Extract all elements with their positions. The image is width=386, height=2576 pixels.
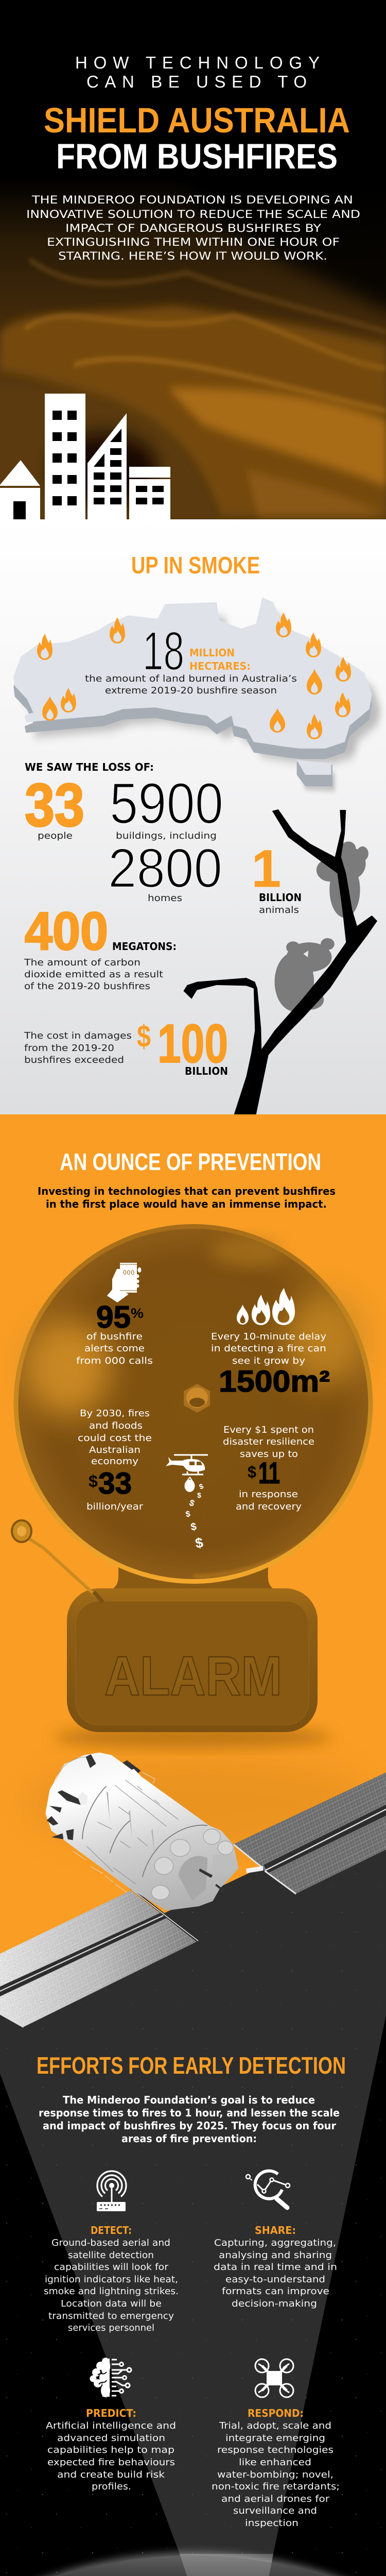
intro text: STARTING. HERE’S HOW IT WOULD WORK. [58, 250, 327, 262]
stat: 18 million hectares [85, 621, 297, 696]
icons: map flames [37, 613, 351, 739]
icon: magnifier with chart [246, 2171, 290, 2208]
stat: 95%: 95 [96, 1300, 131, 1334]
stat: 1500 square metres [211, 1288, 330, 1398]
intro text [26, 194, 360, 262]
intro: goal: and impact of bushfires by 2025. They focus on four [43, 2120, 336, 2132]
stat: 1 billion animals [252, 839, 302, 916]
stat: 1500 square metres: see it grow by [232, 1355, 305, 1366]
bell dome [13, 1224, 373, 1584]
stat: $33 billion: Australian [89, 1445, 141, 1455]
block: share: Capturing, aggregating, [214, 2238, 336, 2248]
text: we saw the loss of: WE SAW THE LOSS OF: [25, 761, 154, 773]
block: respond: non-toxic fire retardants; [212, 2481, 340, 2492]
block: share: SHARE: [255, 2224, 296, 2236]
stat: 18 million hectares: extreme 2019-20 bushfire season [105, 685, 277, 696]
stat: 400 megatons: 400 [25, 902, 108, 961]
block: predict: capabilities help to map [47, 2445, 174, 2455]
stat: 1500 square metres: in detecting a fire can [211, 1343, 326, 1354]
intro: goal: The Minderoo Foundation’s goal is to reduce [63, 2094, 315, 2106]
stat: $33 billion: $ [89, 1472, 98, 1490]
panel: hero [0, 0, 386, 519]
stat: 18 million hectares: the amount of land burned in Australia’s [85, 673, 297, 684]
stat: 400 megatons [24, 902, 177, 992]
stat: 400 megatons: MEGATONS: [112, 940, 177, 953]
stat: 18 million hectares: HECTARES: [189, 660, 251, 672]
intro: goal: response times to fires to 1 hour, and lessen the scale [39, 2107, 340, 2119]
stat: $33 billion: By 2030, fires [80, 1408, 150, 1419]
intro text: INNOVATIVE SOLUTION TO REDUCE THE SCALE AND [26, 208, 360, 221]
icon: helicopter dropping money [166, 1455, 208, 1551]
bell base with ALARM lettering: ALARM [104, 1645, 282, 1707]
block: respond: water-bombing; novel, [217, 2469, 334, 2480]
block: predict: profiles. [92, 2481, 131, 2492]
stat: $11 saved: and recovery [236, 1501, 302, 1512]
stat: 1 billion animals: BILLION [259, 891, 302, 904]
icon: brain circuit [90, 2358, 131, 2397]
intro: goal: areas of fire prevention: [121, 2132, 257, 2145]
panel: prevention and detection sections [0, 1114, 386, 2576]
title: FROM BUSHFIRES [56, 137, 338, 176]
stat: 400 megatons: The amount of carbon [24, 957, 141, 968]
stat: $33 billion: billion/year [86, 1501, 144, 1512]
bell base with ALARM lettering [67, 1566, 318, 1732]
subheading: in the first place would have an immense impact. [46, 1198, 327, 1210]
illustration: earth with australia [0, 2554, 386, 2576]
block: detect: transmitted to emergency [48, 2311, 174, 2321]
block: predict: PREDICT: [86, 2407, 136, 2419]
stat: $11 saved: disaster resilience [223, 1436, 314, 1447]
intro: goal [39, 2094, 340, 2145]
heading: an ounce of prevention: AN OUNCE OF PREVENTION [60, 1148, 321, 1175]
block: respond: like enhanced [239, 2457, 311, 2468]
icon: helicopter dropping money: $ [185, 1510, 191, 1519]
block: respond: surveillance and [233, 2505, 317, 2516]
stat: $11 saved: Every $1 spent on [223, 1425, 314, 1435]
block: predict: Artificial intelligence and [46, 2420, 176, 2431]
stat: $33 billion: could cost the [78, 1433, 152, 1444]
stat: 1500 square metres: Every 10-minute delay [211, 1331, 326, 1342]
stat: $11 saved: 11 [258, 1456, 280, 1490]
panel: an ounce of prevention [0, 1114, 386, 2037]
stat: 1 billion animals: 1 [252, 839, 281, 898]
block: respond: and aerial drones for [221, 2494, 330, 2504]
stat: $100 billion: BILLION [185, 1065, 228, 1077]
block: share: formats can improve [222, 2286, 329, 2297]
title [44, 53, 350, 176]
icon: helicopter dropping money: $ [198, 1482, 205, 1491]
block: detect: DETECT: [91, 2224, 132, 2236]
block: respond: RESPOND: [248, 2407, 304, 2419]
stat: 1500 square metres: 1500m² [219, 1365, 330, 1398]
stat: $100 billion: $ [137, 1019, 151, 1054]
icon: hand holding phone [107, 1263, 141, 1302]
stat: 18 million hectares: 18 [143, 621, 184, 682]
stat: $100 billion: from the 2019-20 [24, 1043, 114, 1054]
block: detect: Ground-based aerial and [51, 2238, 170, 2248]
block: respond: inspection [245, 2518, 299, 2529]
panel: up in smoke [0, 552, 386, 1114]
block: respond: integrate emerging [225, 2433, 325, 2444]
stat: 95%: of bushfire [86, 1331, 143, 1342]
stat: 1 billion animals: animals [259, 905, 299, 916]
heading: up in smoke: UP IN SMOKE [131, 552, 260, 579]
title: CAN BE USED TO [86, 72, 307, 91]
intro text: EXTINGUISHING THEM WITHIN ONE HOUR OF [47, 236, 340, 248]
stat: $11 saved: $ [248, 1463, 256, 1481]
subheading: Investing in technologies that can prevent bushfires [38, 1185, 336, 1197]
stat: 5900 buildings: buildings, including [116, 831, 217, 841]
block: share [214, 2171, 337, 2309]
block: predict [46, 2358, 176, 2492]
stat: $100 billion [24, 1013, 228, 1077]
stat: 400 megatons: dioxide emitted as a result [24, 969, 163, 980]
block: detect [44, 2171, 179, 2333]
title: HOW TECHNOLOGY [75, 53, 320, 72]
stat: $33 billion: economy [91, 1456, 138, 1467]
block: share: decision-making [232, 2298, 317, 2309]
icon: helicopter dropping money: $ [188, 1498, 196, 1509]
block: detect: ignition indicators like heat, [45, 2274, 178, 2285]
illustration: solar panels [0, 1772, 386, 2027]
illustration: burnt tree with koalas [183, 809, 377, 1114]
stat: $11 saved: saves up to [240, 1449, 298, 1460]
icon: helicopter dropping money: $ [197, 1491, 201, 1499]
block: detect: services personnel [68, 2323, 154, 2333]
smoke background [0, 158, 386, 519]
block: detect: Location data will be [61, 2298, 162, 2309]
icon: city buildings [0, 394, 170, 519]
stat: $100 billion: 100 [157, 1013, 228, 1074]
icon: antenna [97, 2171, 126, 2211]
block: detect: smoke and lightning strikes. [44, 2286, 179, 2297]
spotlight beam [0, 1808, 386, 2576]
block: detect: capabilities will look for [54, 2262, 169, 2273]
subheading [38, 1185, 336, 1210]
stat: 2800 homes: homes [148, 893, 182, 904]
block: respond: response technologies [217, 2445, 334, 2455]
block: share: easy-to-understand [225, 2274, 325, 2285]
block: respond: Trial, adopt, scale and [219, 2420, 331, 2431]
stat: 5900 buildings: 5900 [110, 771, 223, 836]
block: detect: satellite detection [68, 2250, 154, 2261]
icon: drone [255, 2359, 293, 2397]
block: share: data in real time and in [214, 2262, 337, 2273]
stat: 400 megatons: of the 2019-20 bushfires [24, 981, 150, 992]
stat: $11 saved: in response [239, 1489, 298, 1500]
block: predict: expected fire behaviours [47, 2457, 175, 2468]
stat: $33 billion: 33 [98, 1467, 132, 1500]
block: respond [212, 2359, 340, 2529]
block: share: analysing and sharing [219, 2250, 332, 2261]
illustration: satellite [45, 1753, 238, 1910]
stat: 33 people: people [38, 831, 73, 841]
stat: 95%: from 000 calls [76, 1355, 153, 1366]
intro text: THE MINDEROO FOUNDATION IS DEVELOPING AN [31, 194, 353, 206]
stat: 95% [76, 1263, 153, 1366]
stat: 95%: alerts come [84, 1343, 145, 1354]
icon: helicopter dropping money: $ [194, 1535, 204, 1551]
icon: helicopter dropping money: $ [190, 1521, 198, 1533]
stat: 18 million hectares: MILLION [189, 647, 235, 659]
stat: 33 people: 33 [25, 771, 84, 839]
map: australia [13, 597, 380, 791]
intro text: IMPACT OF DANGEROUS BUSHFIRES BY [65, 222, 321, 234]
stat: $100 billion: The cost in damages [24, 1030, 132, 1041]
stat: $11 saved [223, 1425, 314, 1512]
icon: growing flames [237, 1288, 295, 1325]
bell striker arm [12, 1520, 103, 1602]
illustration: alarm bell [12, 1224, 376, 1850]
icon: hand holding phone: 000 [123, 1269, 134, 1276]
block: predict: and create build risk [57, 2469, 165, 2480]
title: SHIELD AUSTRALIA [44, 100, 350, 140]
stat: $33 billion [78, 1408, 152, 1512]
stat: 2800 homes: 2800 [108, 837, 222, 899]
stat: $100 billion: bushfires exceeded [24, 1055, 124, 1065]
panel: efforts for early detection [0, 1753, 386, 2576]
block: predict: advanced simulation [57, 2433, 165, 2444]
stat: $33 billion: and floods [89, 1420, 143, 1431]
beam on earth [180, 2554, 273, 2576]
stat: 95%: % [131, 1306, 144, 1321]
bell hub [184, 1384, 210, 1413]
